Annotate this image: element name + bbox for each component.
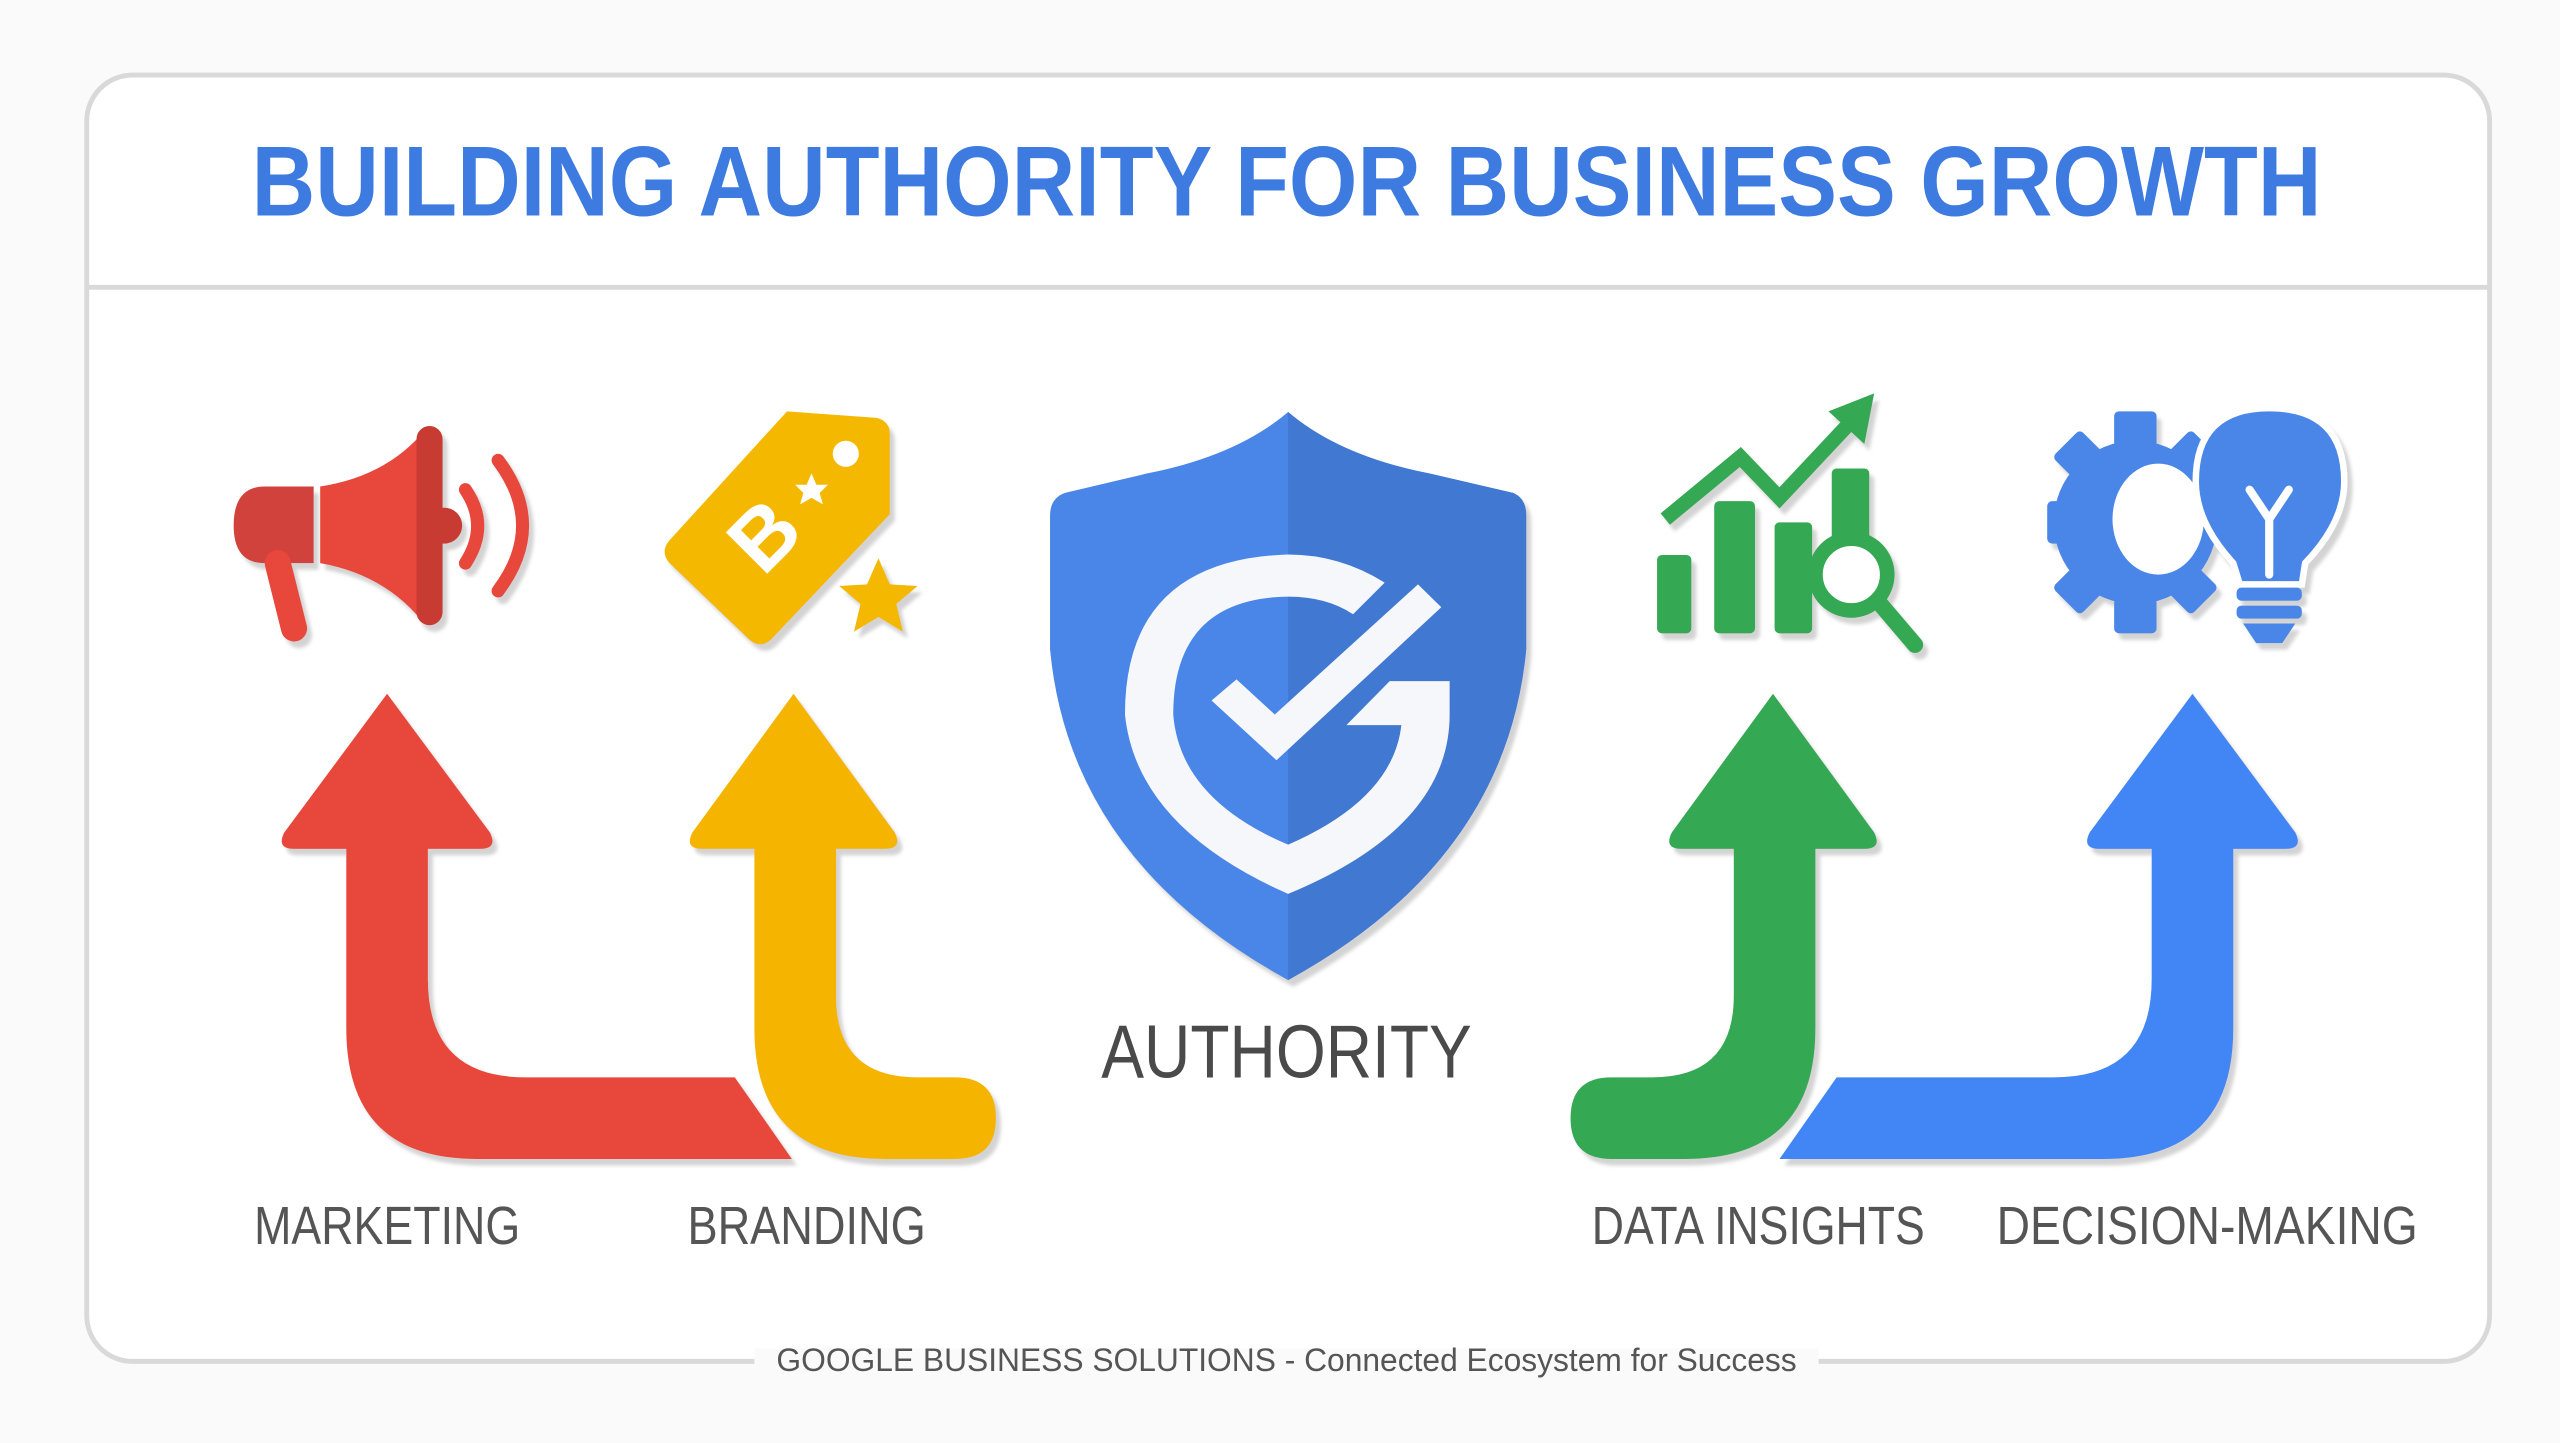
icon: brand tag <box>665 411 918 644</box>
arrow: branding yellow <box>690 694 996 1159</box>
label: branding: BRANDING <box>687 1196 926 1256</box>
icon: gear and lightbulb <box>2047 408 2344 643</box>
title: BUILDING AUTHORITY FOR BUSINESS GROWTH <box>252 126 2321 237</box>
icon: brand tag: B <box>709 480 819 590</box>
label: decision-making: DECISION-MAKING <box>1997 1196 2418 1256</box>
shield icon <box>1050 412 1526 980</box>
arrow: marketing red <box>282 694 792 1159</box>
icon: megaphone <box>234 426 523 628</box>
icon: chart with magnifier <box>1657 393 1915 645</box>
label: authority: AUTHORITY <box>1101 1009 1472 1093</box>
footer: GOOGLE BUSINESS SOLUTIONS - Connected Ecosystem for Success <box>776 1341 1797 1378</box>
arrow: data insights green <box>1571 694 1877 1159</box>
arrow: decision-making blue <box>1780 694 2298 1159</box>
label: data insights: DATA INSIGHTS <box>1592 1196 1925 1256</box>
label: marketing: MARKETING <box>254 1196 520 1256</box>
